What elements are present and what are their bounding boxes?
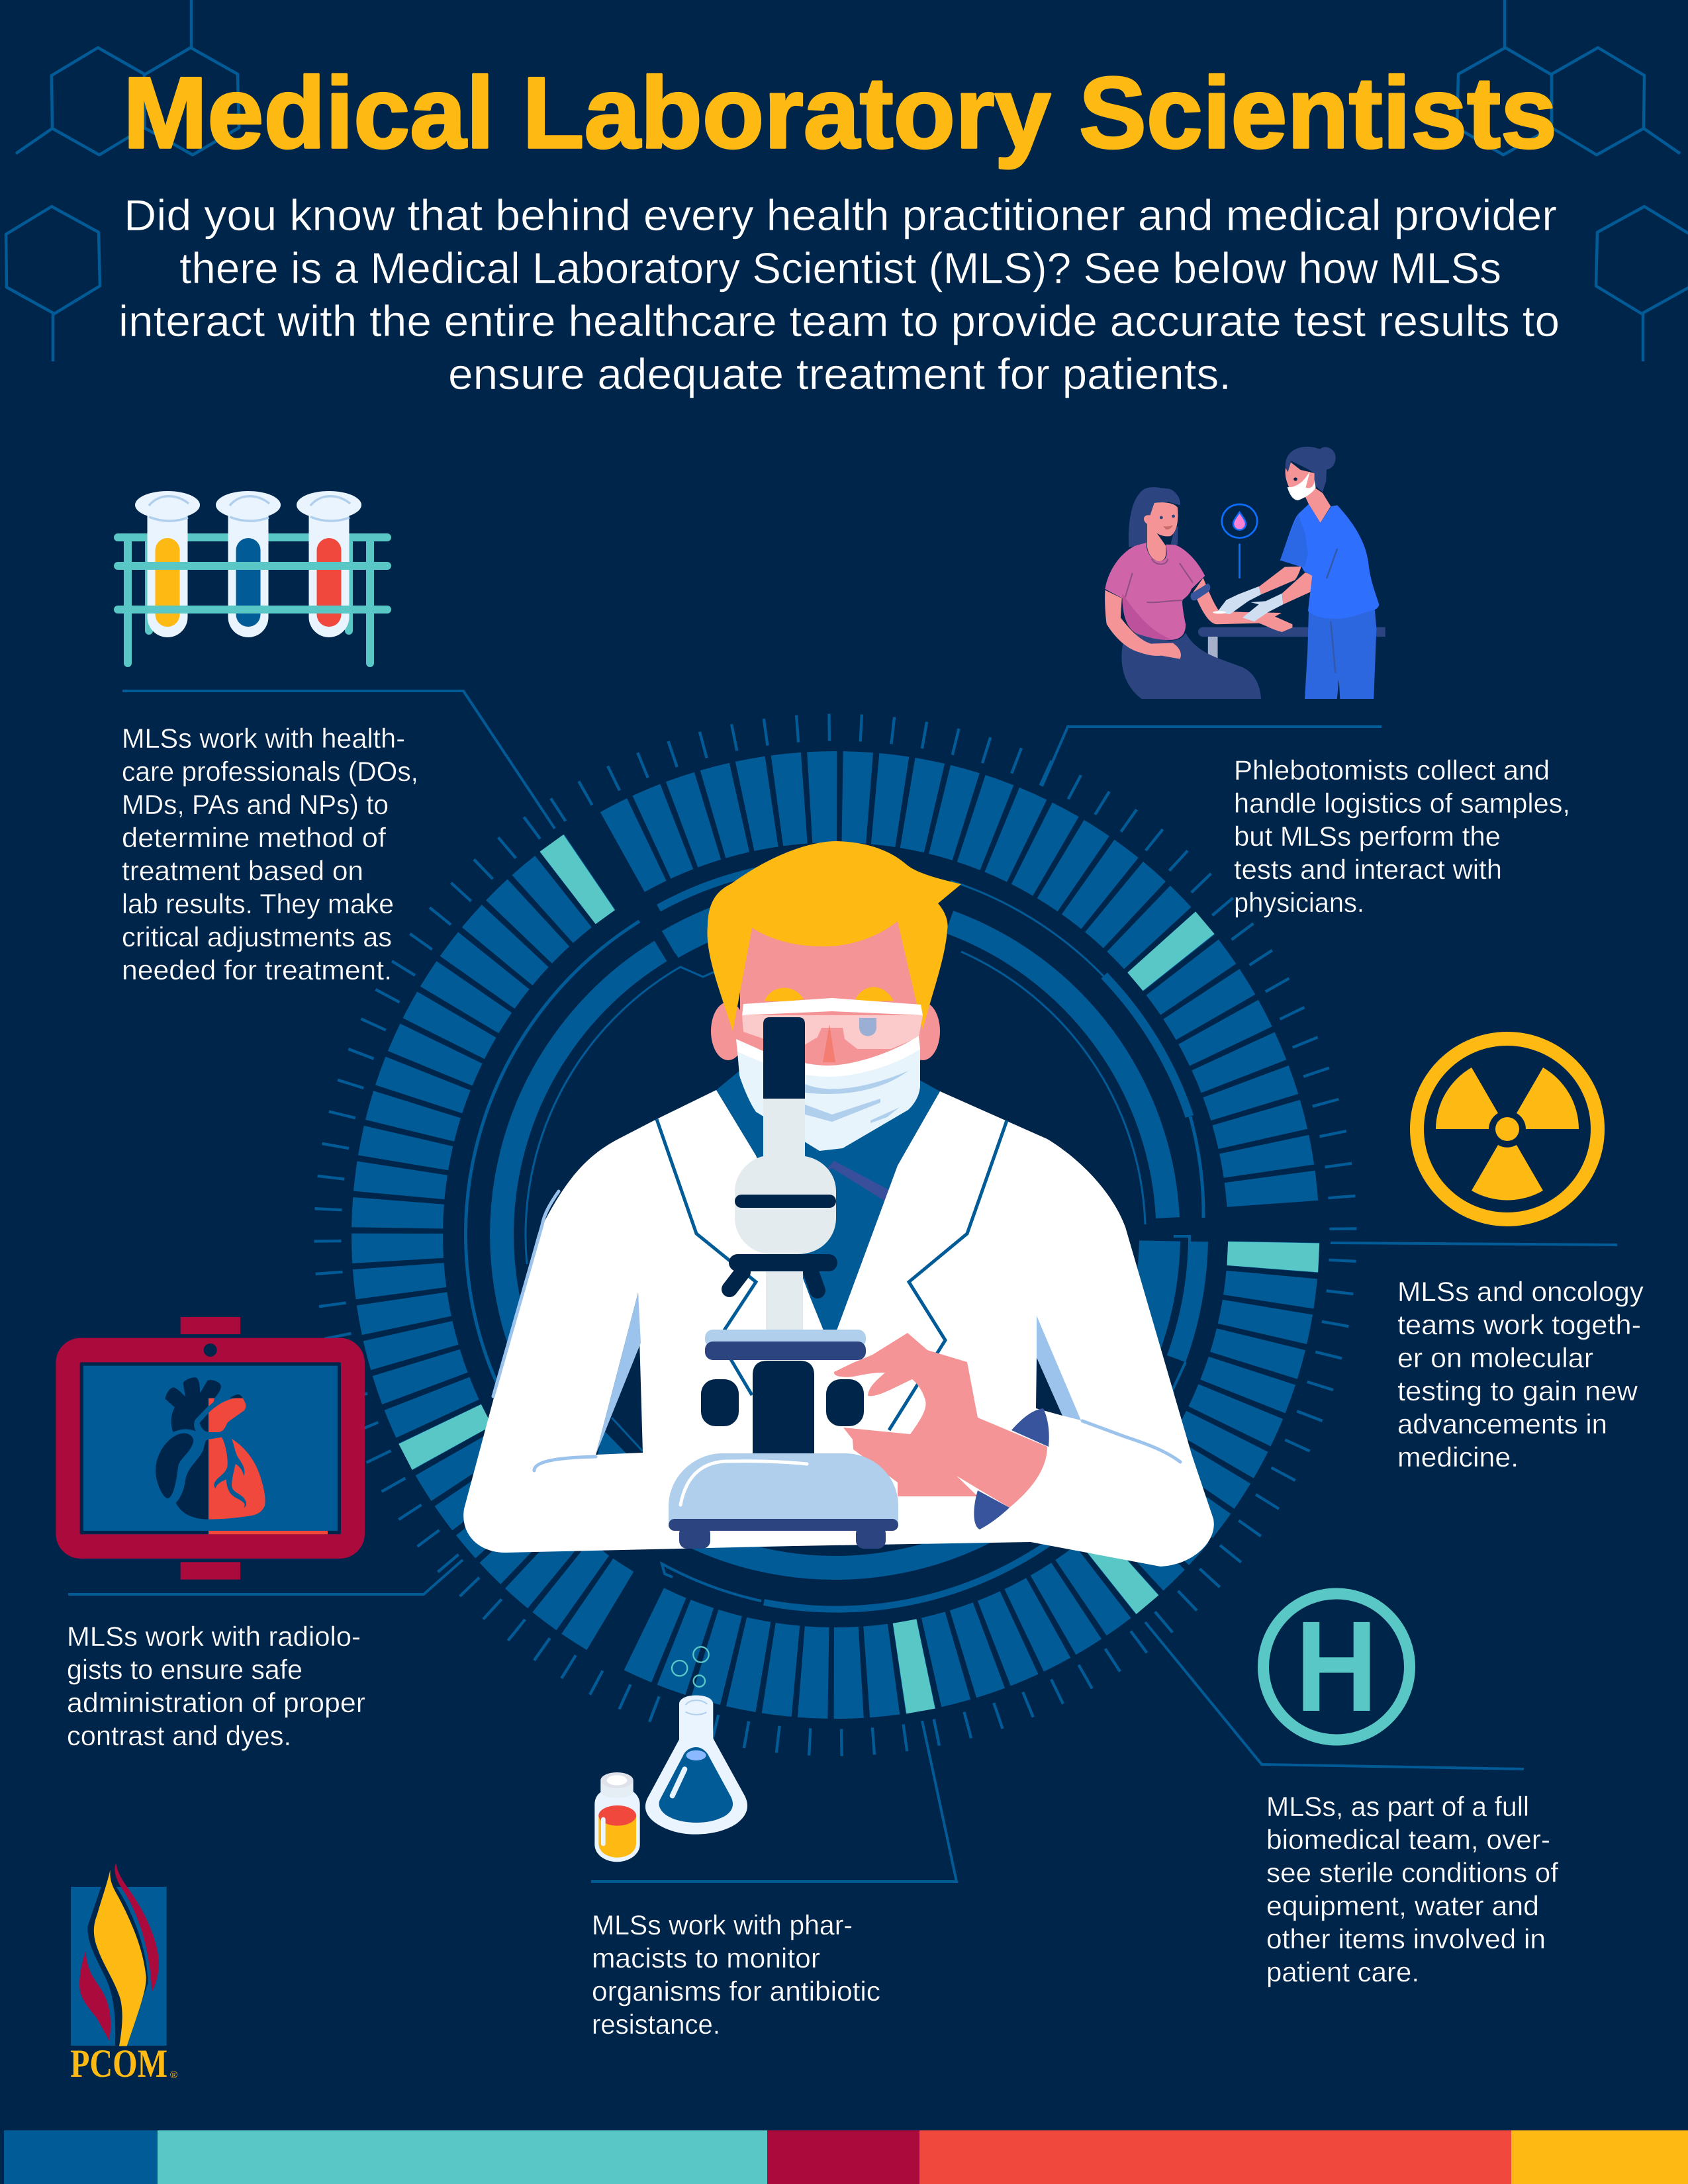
lab coat — [463, 1090, 1214, 1567]
radial gauge ring behind scientist — [328, 727, 1343, 1743]
tube blue — [216, 491, 281, 637]
coat shading — [596, 1293, 1081, 1455]
tie detail — [823, 1161, 889, 1201]
text: biomedical team — [1266, 1791, 1558, 1987]
text: phlebotomists — [1234, 754, 1570, 918]
text: health-care professionals: care professionals (DOs, — [122, 756, 418, 787]
text: oncology — [1397, 1276, 1644, 1473]
gaps in bars ring — [566, 811, 1323, 1671]
PCOM logo — [70, 1862, 177, 2085]
text: radiologists — [67, 1621, 365, 1751]
text: oncology: advancements in — [1397, 1408, 1607, 1439]
sleeve cuff — [974, 1408, 1049, 1529]
text: oncology: er on molecular — [1397, 1342, 1593, 1373]
segmented bars ring — [397, 797, 1274, 1673]
hair — [707, 841, 961, 1031]
face mask — [736, 1036, 920, 1151]
text: health-care professionals: MDs, PAs and NPs) to — [122, 789, 389, 820]
text: radiologists: gists to ensure safe — [67, 1654, 303, 1685]
goggles lens — [742, 1015, 923, 1049]
hand — [834, 1333, 1047, 1508]
heart — [156, 1377, 265, 1520]
intro text block: ensure adequate treatment for patients. — [448, 349, 1231, 398]
microscope — [669, 1017, 898, 1549]
text: pharmacists: organisms for antibiotic — [592, 1976, 880, 2007]
intro text block — [118, 191, 1560, 398]
bubbles — [672, 1647, 709, 1687]
decorative hexagons right — [1457, 0, 1688, 361]
tube yellow — [135, 491, 200, 637]
head — [707, 841, 961, 1079]
title: Medical Laboratory Scientists — [123, 56, 1557, 169]
icon: flask and vial — [594, 1647, 747, 1862]
icon: phlebotomist drawing blood from patient — [1105, 447, 1385, 699]
text: radiologists: MLSs work with radiolo- — [67, 1621, 361, 1652]
text: biomedical team: equipment, water and — [1266, 1890, 1539, 1921]
decorative hexagons left — [6, 0, 239, 361]
eyepiece — [735, 1099, 836, 1254]
eye — [859, 1018, 876, 1036]
text: pharmacists — [592, 1909, 880, 2040]
leader lines connecting ring to callouts — [68, 691, 1617, 1882]
vial — [594, 1772, 640, 1862]
text: health-care professionals: lab results. They make — [122, 888, 394, 919]
icon: tablet with heart scan — [56, 1317, 365, 1580]
scientist illustration — [463, 841, 1214, 1567]
nurse — [1213, 447, 1379, 699]
PCOM wordmark: PCOM — [70, 2042, 167, 2085]
tick marks ring — [328, 727, 1343, 1743]
neck — [766, 1267, 803, 1331]
text: oncology: MLSs and oncology — [1397, 1276, 1644, 1307]
icon: radiation symbol — [1417, 1039, 1598, 1219]
text: phlebotomists: Phlebotomists collect and — [1234, 754, 1550, 786]
blood drop marker — [1222, 504, 1257, 578]
nose — [823, 1024, 835, 1062]
bottom colour band — [4, 2130, 1688, 2184]
coat edge lines — [493, 1191, 1180, 1471]
text: health-care professionals: MLSs work with health- — [122, 723, 405, 754]
lapels — [657, 1119, 1007, 1430]
text: pharmacists: MLSs work with phar- — [592, 1909, 853, 1940]
icon: hospital H sign: H — [1295, 1594, 1378, 1739]
text: biomedical team: other items involved in — [1266, 1923, 1546, 1954]
text: health-care professionals: critical adjustments as — [122, 921, 392, 952]
intro text block: interact with the entire healthcare team to provide accurate test results to — [118, 296, 1560, 345]
text: oncology: testing to gain new — [1397, 1375, 1638, 1406]
text: health-care professionals: needed for treatment. — [122, 954, 392, 985]
text: radiologists: contrast and dyes. — [67, 1720, 291, 1751]
intro text block: there is a Medical Laboratory Scientist (MLS)? See below how MLSs — [179, 244, 1501, 293]
text: biomedical team: see sterile conditions of — [1266, 1857, 1558, 1888]
text: health-care professionals: treatment based on — [122, 855, 363, 886]
text: health-care professionals: determine method of — [122, 822, 386, 853]
tube red — [297, 491, 361, 637]
knobs — [701, 1379, 739, 1426]
text: phlebotomists: physicians. — [1234, 887, 1364, 918]
intro text block: Did you know that behind every health practitioner and medical provider — [124, 191, 1557, 240]
text: radiologists: administration of proper — [67, 1687, 365, 1718]
text: oncology: medicine. — [1397, 1441, 1519, 1473]
column — [753, 1361, 814, 1456]
registered mark: ® — [170, 2070, 177, 2081]
flask — [645, 1696, 747, 1835]
goggles strap — [742, 998, 923, 1015]
table — [1208, 635, 1218, 660]
icon: test tubes in rack — [118, 491, 387, 663]
eyebrows — [765, 987, 894, 1001]
text: health-care professionals — [122, 723, 418, 985]
text: oncology: teams work togeth- — [1397, 1309, 1641, 1340]
patient — [1105, 487, 1292, 699]
inner arcs — [465, 862, 1203, 1610]
base — [669, 1453, 898, 1522]
text: phlebotomists: handle logistics of samples, — [1234, 788, 1570, 819]
text: biomedical team: MLSs, as part of a full — [1266, 1791, 1529, 1822]
objective arms — [729, 1272, 818, 1291]
text: biomedical team: biomedical team, over- — [1266, 1824, 1550, 1855]
feet — [679, 1525, 710, 1549]
teal highlighted bars — [399, 835, 1319, 1713]
text: pharmacists: resistance. — [592, 2009, 720, 2040]
text: biomedical team: patient care. — [1266, 1956, 1419, 1987]
text: phlebotomists: tests and interact with — [1234, 854, 1502, 885]
text: phlebotomists: but MLSs perform the — [1234, 821, 1501, 852]
icon: hospital H sign — [1263, 1594, 1410, 1740]
stage — [705, 1330, 866, 1347]
collar and shirt — [716, 1071, 940, 1330]
text: pharmacists: macists to monitor — [592, 1942, 820, 1974]
flame mark — [71, 1862, 167, 2046]
